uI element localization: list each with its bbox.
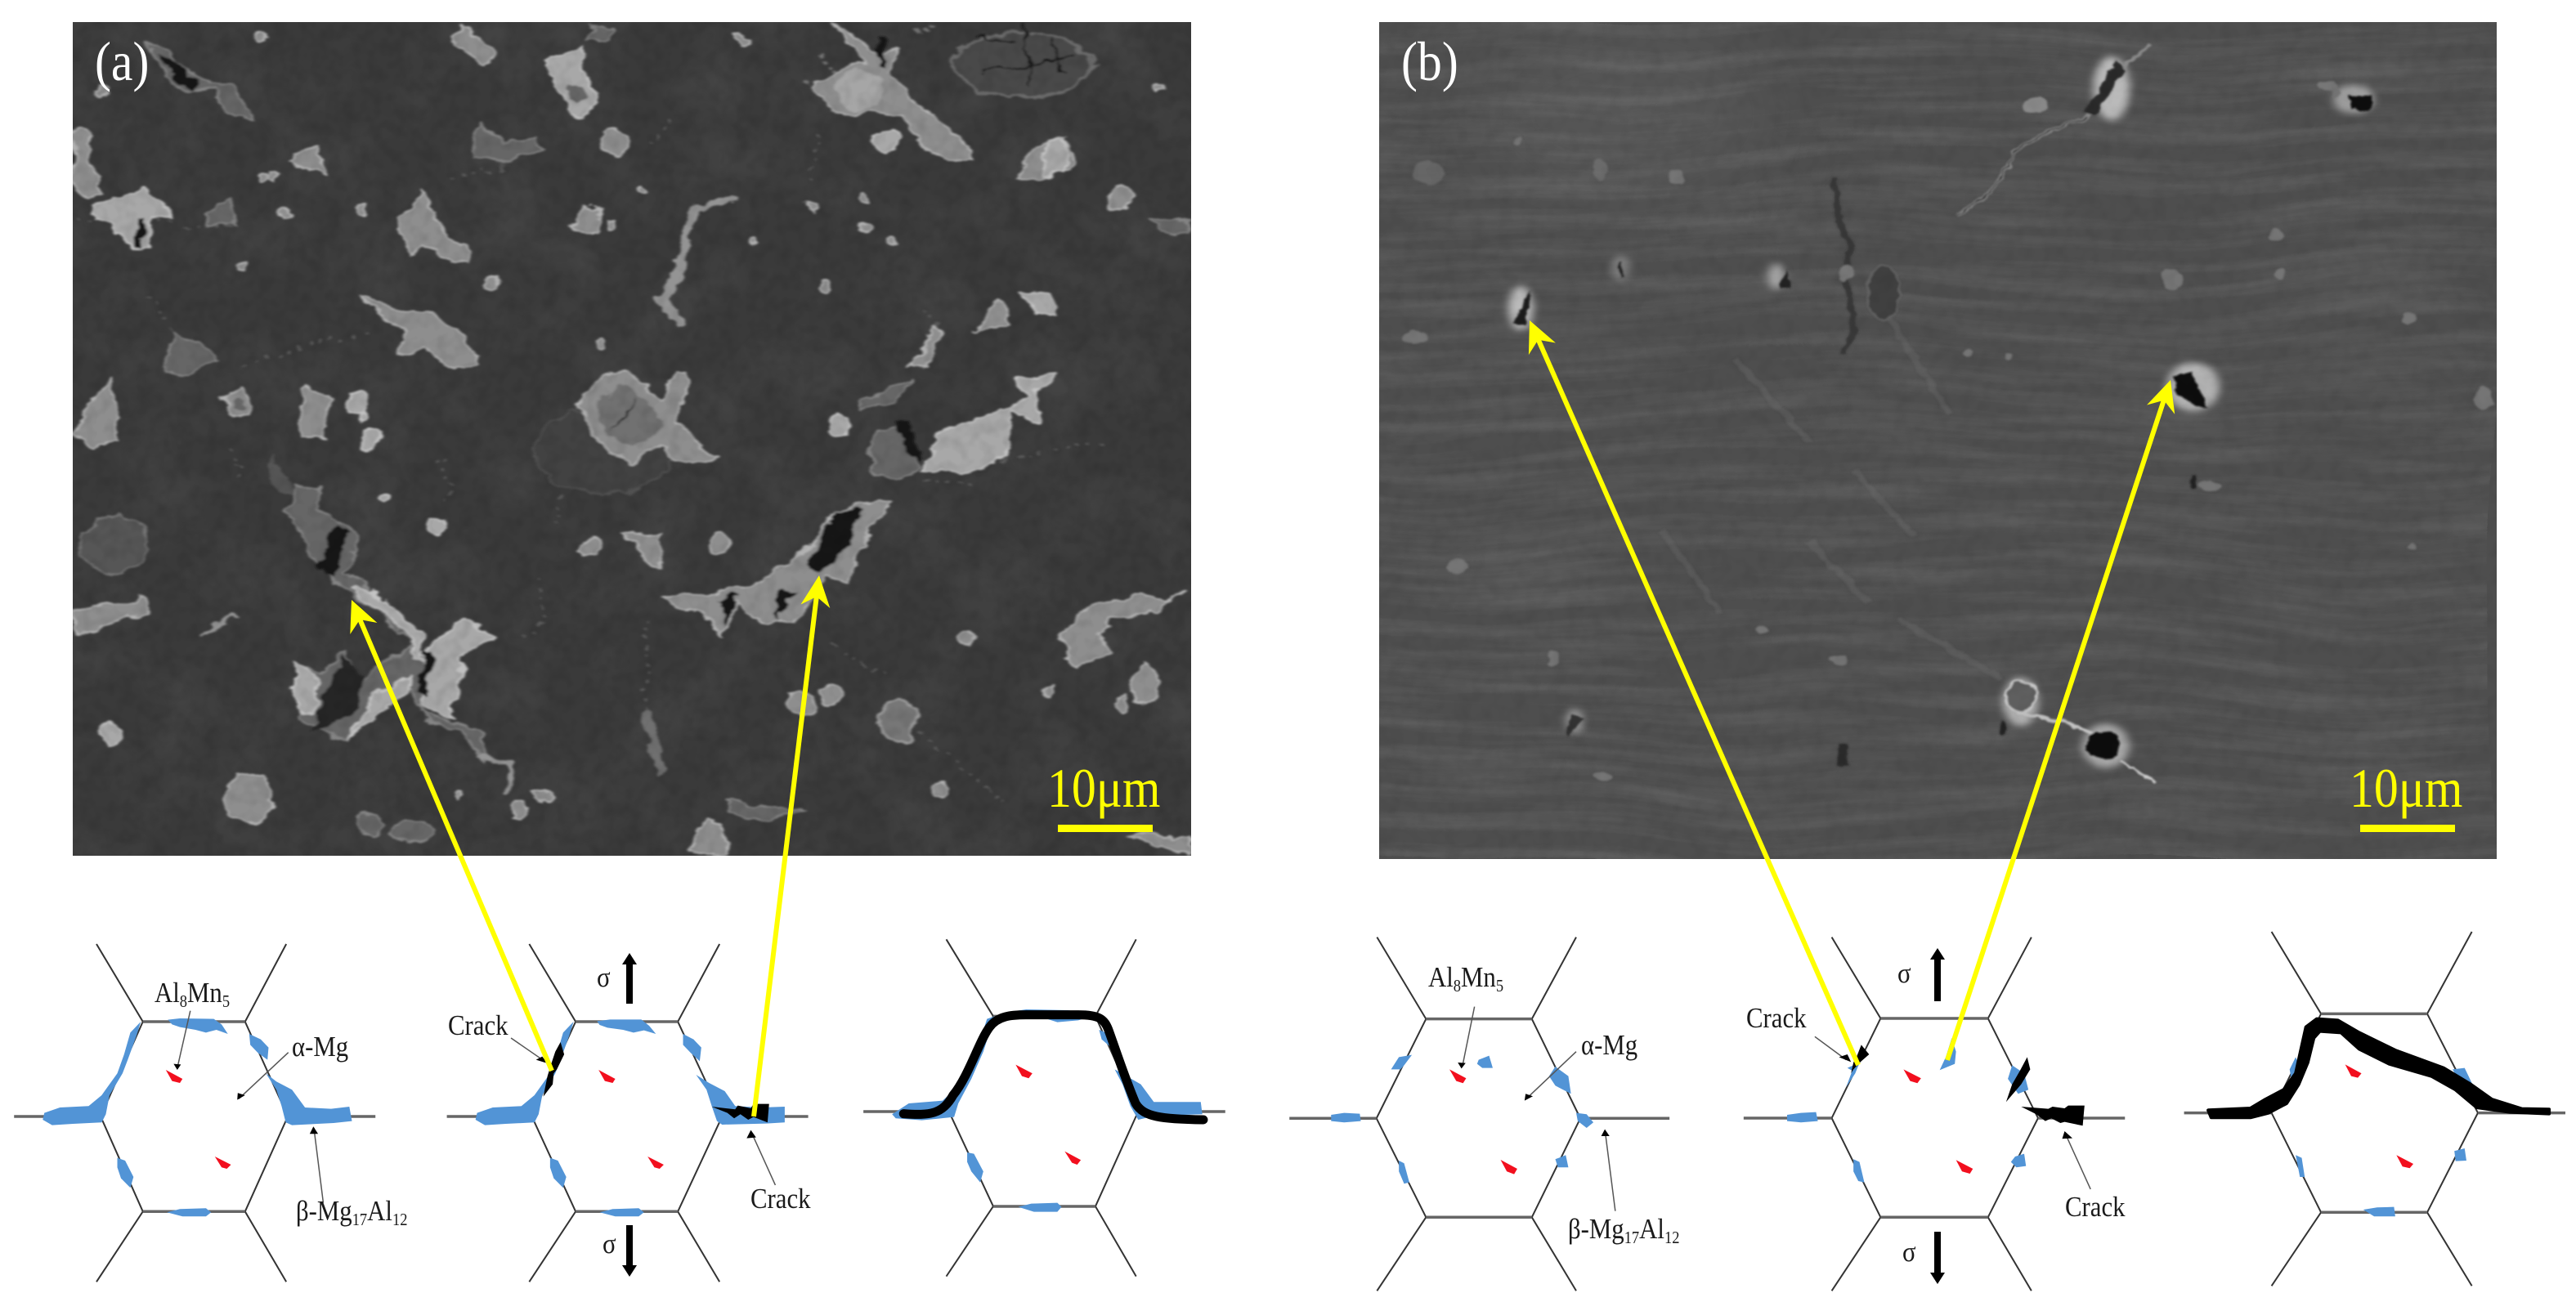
label: crack left: Crack xyxy=(448,1010,508,1041)
arrow: crack link b right xyxy=(1947,380,2175,1060)
arrow: crack link a right xyxy=(754,575,830,1116)
panel a: SEM micrograph xyxy=(73,22,1191,856)
label: Al8Mn5 b: 8 xyxy=(1454,977,1461,996)
arrow: stress up xyxy=(622,953,637,1004)
schematic 1: alloy a initial xyxy=(14,944,375,1282)
panel b: SEM micrograph xyxy=(1379,22,2497,859)
label: Al8Mn5 b: Mn xyxy=(1461,962,1496,993)
arrow: stress b down xyxy=(1930,1232,1945,1284)
label: beta-Mg17Al12 b: β-Mg xyxy=(1568,1214,1624,1245)
schematic 3: alloy a crack propagated xyxy=(863,939,1225,1277)
scale bar a: 10μm xyxy=(1047,757,1160,819)
stress label b bottom: σ xyxy=(1902,1237,1916,1268)
panel label (b): (b) xyxy=(1401,30,1458,92)
label: beta-Mg17Al12 b: 12 xyxy=(1664,1228,1679,1247)
label: crack b left: Crack xyxy=(1746,1003,1807,1034)
label: crack right: Crack xyxy=(750,1183,811,1215)
scale bar b: 10μm xyxy=(2350,757,2462,819)
stress label top: σ xyxy=(597,962,611,993)
label: Al8Mn5 b: 5 xyxy=(1496,977,1503,996)
stress label b top: σ xyxy=(1897,958,1911,989)
schematic 4: alloy b initial xyxy=(1289,937,1669,1291)
arrow: stress down xyxy=(622,1225,637,1277)
label: alpha-Mg b: α-Mg xyxy=(1581,1030,1637,1061)
label: beta-Mg17Al12: Al xyxy=(367,1196,392,1227)
label: alpha-Mg: α-Mg xyxy=(292,1031,348,1063)
label: beta-Mg17Al12 b: Al xyxy=(1639,1214,1664,1245)
arrow: crack link a left xyxy=(350,600,552,1071)
arrow: crack link b left xyxy=(1529,320,1858,1065)
schematic 5: alloy b crack initiation xyxy=(1744,937,2125,1291)
arrow: stress b up xyxy=(1930,948,1945,1001)
glow halos xyxy=(1508,56,2374,768)
label: beta-Mg17Al12: 12 xyxy=(392,1210,407,1229)
label: beta-Mg17Al12: 17 xyxy=(352,1210,367,1229)
label: beta-Mg17Al12 b: 17 xyxy=(1624,1228,1639,1247)
schematic 6: alloy b crack propagated xyxy=(2184,932,2565,1286)
label: Al8Mn5: Al xyxy=(155,978,180,1009)
label: Al8Mn5: 8 xyxy=(180,992,187,1011)
panel label (a): (a) xyxy=(95,30,149,92)
schematic 2: alloy a crack initiation xyxy=(447,944,809,1282)
stress label bottom: σ xyxy=(603,1228,616,1260)
label: Al8Mn5 b: Al xyxy=(1428,962,1454,993)
label: beta-Mg17Al12: β-Mg xyxy=(296,1196,352,1227)
label: Al8Mn5: 5 xyxy=(222,992,230,1011)
label: Al8Mn5: Mn xyxy=(187,978,222,1009)
label: crack b right: Crack xyxy=(2065,1192,2126,1223)
